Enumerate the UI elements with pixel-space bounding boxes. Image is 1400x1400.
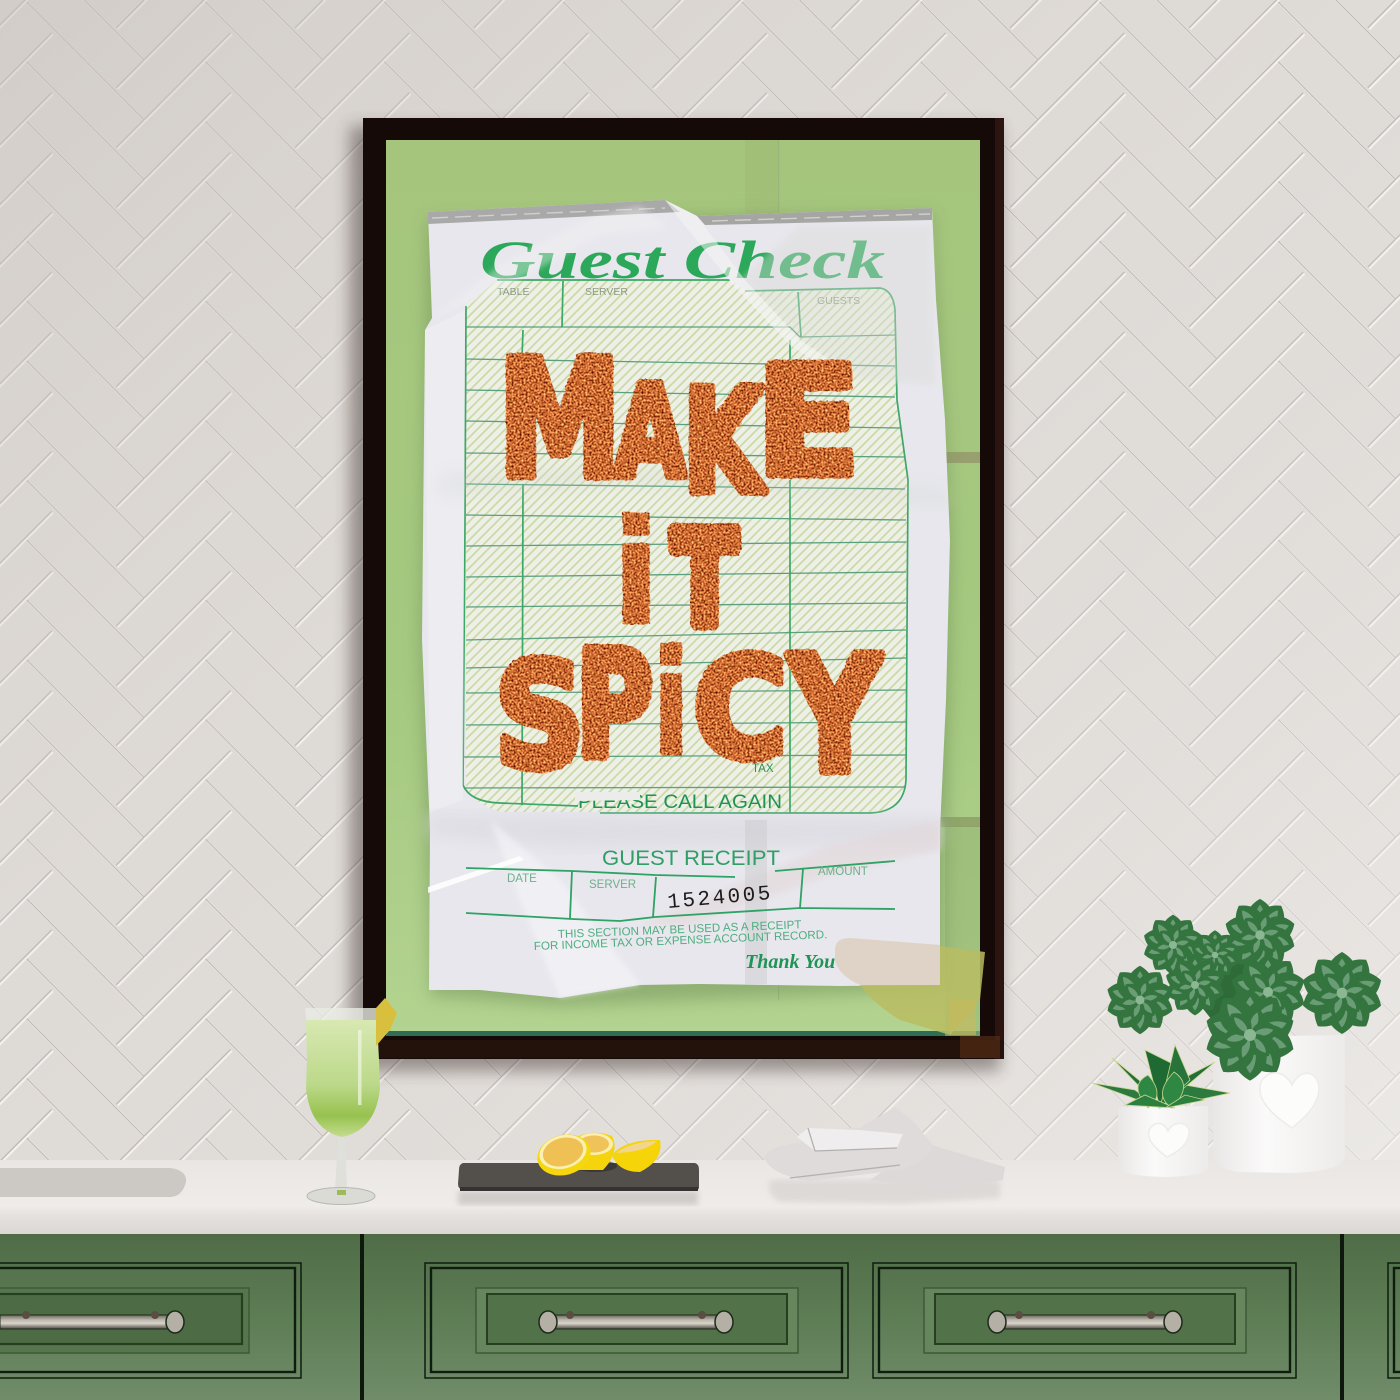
table column labels: SERVER [585, 286, 628, 298]
paper fold shading [425, 200, 950, 998]
frame drop shadow [350, 126, 1000, 1071]
drawer handle: centre [539, 1311, 733, 1333]
paper shadow on the poster [420, 215, 952, 1006]
footer: please call again: PLEASE CALL AGAIN [578, 792, 782, 813]
succulent rosettes [1104, 898, 1386, 1082]
spice lettering: MAKE IT SPICY: P [576, 620, 653, 790]
icon: embossed heart [1149, 1123, 1189, 1157]
table column labels: TABLE [497, 286, 529, 298]
spice lettering: MAKE IT SPICY: M [499, 327, 620, 513]
lemon halves [533, 1129, 661, 1181]
drawer handle: right [988, 1311, 1182, 1333]
succulent foliage mass [1190, 935, 1290, 1045]
receipt labels: DATE [507, 873, 537, 885]
table column labels: GUESTS [817, 295, 860, 307]
table ruled lines [463, 280, 908, 813]
poster frame [363, 118, 1004, 1059]
countertop [0, 1160, 1400, 1234]
drawer panel: far right [1388, 1263, 1400, 1378]
spice lettering: MAKE IT SPICY: E [757, 336, 859, 509]
slate board reflection [458, 1191, 698, 1205]
agave plant in small pot [1092, 1045, 1230, 1108]
check binding strip [428, 200, 932, 225]
tax label: TAX [752, 763, 774, 775]
table hatching [466, 280, 908, 812]
folded white towel [764, 1107, 1005, 1191]
sink recess [0, 1168, 186, 1197]
cabinet drawers [0, 1234, 1400, 1400]
crumpled guest check paper [422, 200, 950, 998]
cocktail glass with green drink [305, 998, 397, 1204]
large white pot [1213, 1035, 1345, 1173]
spice lettering: MAKE IT SPICY: Y [787, 623, 882, 808]
spice lettering: MAKE IT SPICY: C [694, 630, 787, 790]
table column labels [497, 286, 860, 307]
receipt labels: AMOUNT [818, 866, 868, 878]
spice lettering: MAKE IT SPICY: i [652, 620, 690, 789]
drawer panel: centre [425, 1263, 848, 1378]
icon: lemon wedge [376, 998, 397, 1046]
receipt notice: FOR INCOME TAX OR EXPENSE ACCOUNT RECORD. [534, 928, 828, 953]
spice lettering: MAKE IT SPICY: i [612, 490, 660, 657]
receipt number: 1524005 [667, 883, 774, 915]
slate serving board [458, 1163, 699, 1191]
receipt labels [507, 866, 868, 891]
receipt notice: THIS SECTION MAY BE USED AS A RECEIPT [558, 918, 802, 941]
thank you note: Thank You [745, 951, 835, 973]
heading: Guest Check: Guest Check [480, 230, 885, 290]
glass reflection: yellow shape over paper corner [835, 938, 1000, 1058]
receipt labels: SERVER [589, 879, 636, 891]
drawer handle: left [0, 1311, 184, 1333]
drawer panel: right [873, 1263, 1296, 1378]
receipt form lines [466, 861, 895, 921]
spice lettering: MAKE IT SPICY: T [673, 507, 737, 654]
drawer panel: left [0, 1263, 301, 1378]
spice lettering: MAKE IT SPICY [495, 327, 882, 808]
small white pot [1118, 1106, 1208, 1177]
spice lettering: MAKE IT SPICY: K [683, 360, 766, 525]
glass reflection: door and window shapes [745, 140, 980, 1036]
guest receipt section [466, 847, 895, 973]
spice lettering: MAKE IT SPICY: S [495, 632, 584, 800]
receipt heading: GUEST RECEIPT [602, 847, 780, 870]
towel reflection [769, 1180, 1000, 1204]
guest check table [463, 280, 908, 813]
spice lettering: MAKE IT SPICY: A [614, 360, 686, 507]
icon: embossed heart [1260, 1073, 1319, 1128]
